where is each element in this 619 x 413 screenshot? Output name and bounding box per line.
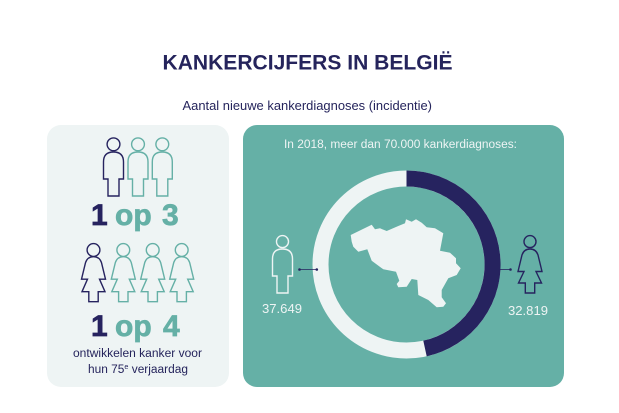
caption (73, 348, 202, 376)
panel: diagnoses 2018 (243, 125, 564, 387)
caption: e (124, 364, 129, 371)
statistic: 1 op 3: 3 (162, 199, 179, 232)
map of Belgium (351, 219, 461, 307)
value: men: 37.649 (262, 301, 302, 316)
statistic: 1 op 4: 4 (163, 310, 180, 343)
panel: lifetime risk (47, 125, 229, 387)
icon: man (152, 138, 172, 196)
caption: ontwikkelen kanker voor (73, 348, 202, 360)
icon: woman (518, 236, 542, 293)
icon: woman highlighted (82, 244, 106, 302)
panel heading: In 2018, meer dan 70.000 kankerdiagnoses: (284, 139, 517, 151)
icon: man (272, 236, 292, 293)
value: women: 32.819 (508, 303, 548, 318)
icon row: 1 of 4 women (82, 244, 194, 302)
statistic: 1 op 4: op (115, 310, 152, 343)
subtitle: Aantal nieuwe kankerdiagnoses (incidentie) (182, 99, 432, 113)
icon: woman (141, 244, 165, 302)
statistic: 1 op 4: 1 (91, 310, 108, 343)
icon: man highlighted (104, 138, 124, 196)
title: KANKERCIJFERS IN BELGIË (162, 50, 452, 74)
caption: hun 75 (88, 364, 123, 376)
donut chart (320, 178, 493, 350)
icon: man (128, 138, 148, 196)
statistic: 1 op 3: op (115, 199, 152, 232)
caption: verjaardag (128, 364, 188, 376)
connector: women (499, 269, 511, 270)
connector: men (299, 269, 318, 270)
icon: woman (111, 244, 135, 302)
icon: woman (170, 244, 194, 302)
statistic: 1 op 3: 1 (91, 199, 108, 232)
icon row: 1 of 3 men (104, 138, 172, 196)
